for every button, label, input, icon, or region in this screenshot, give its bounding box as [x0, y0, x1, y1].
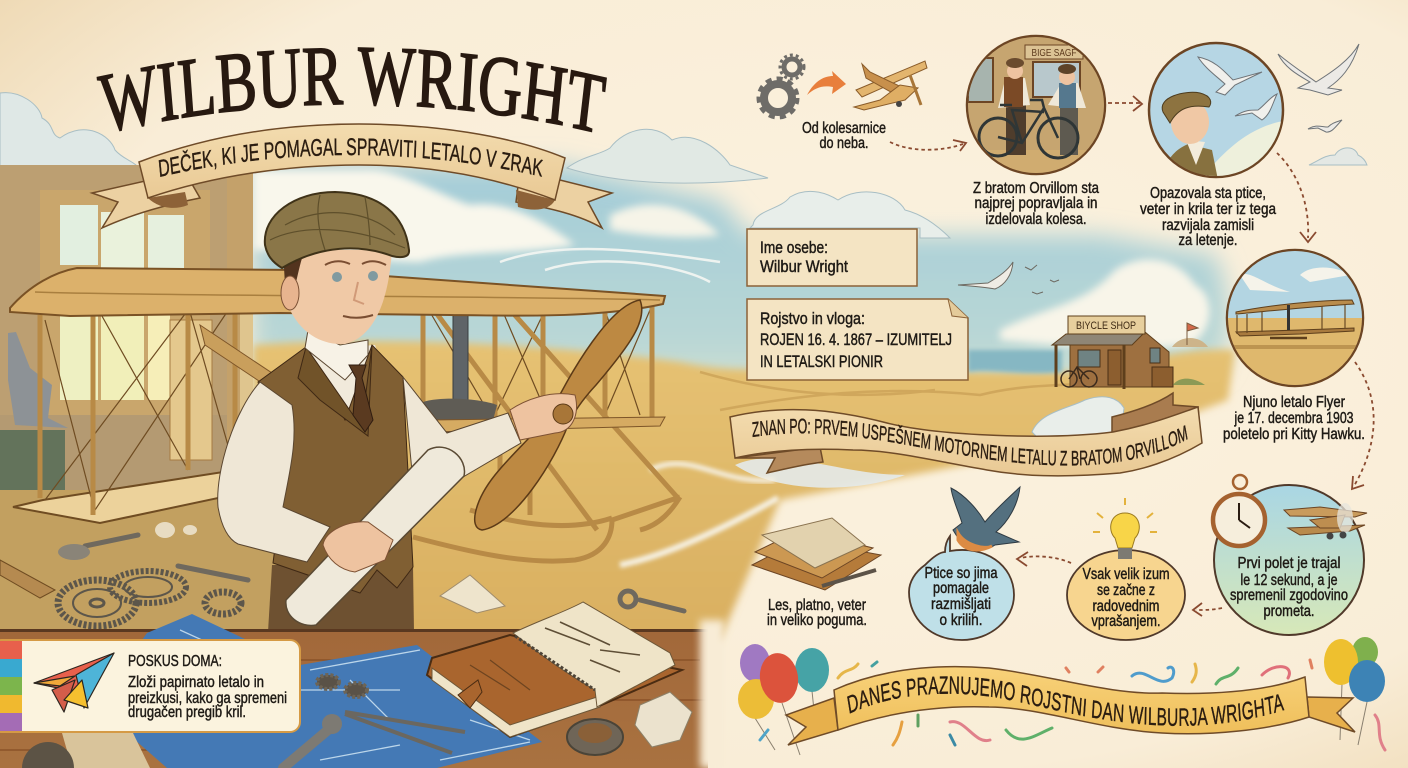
color stripes	[0, 641, 22, 731]
arrow	[1277, 153, 1316, 242]
balloons left	[738, 644, 829, 755]
caption: bicycles: najprej popravljala in	[974, 195, 1098, 212]
left sleeve	[218, 382, 330, 562]
workbench	[0, 620, 724, 768]
bench tools	[22, 675, 692, 768]
birthday ribbon	[784, 666, 1356, 746]
callout: try at home: drugačen pregib kril.	[128, 704, 246, 721]
workshop floor	[0, 470, 280, 635]
circle: first flight: Prvi polet je trajal	[1238, 555, 1340, 572]
info card: birth and role: ROJEN 16. 4. 1867 – IZUMITELJ	[760, 331, 952, 349]
clouds	[0, 93, 1209, 565]
info card: name: Wilbur Wright	[760, 258, 848, 276]
subtitle ribbon	[90, 123, 614, 230]
caption: from bike shop to sky: Od kolesarnice	[802, 120, 886, 137]
callout: try at home	[0, 640, 300, 732]
icon: light bulb	[1093, 498, 1157, 559]
barrel and tool	[0, 430, 65, 545]
birthday ribbon: DANES PRAZNUJEMO ROJSTNI DAN WILBURJA WRIGHTA	[847, 676, 1284, 726]
callout: try at home: Zloži papirnato letalo in	[128, 674, 264, 691]
bubble: curiosity: radovednim	[1092, 598, 1160, 615]
bubble: curiosity: Vsak velik izum	[1082, 566, 1170, 583]
vest	[258, 345, 413, 593]
scene: sky and desert backdrop	[253, 165, 1235, 640]
caption: birds: razvijala zamisli	[1162, 217, 1254, 234]
bubble: birds helped: pomagale	[933, 580, 989, 597]
seagull over dunes	[958, 262, 1059, 294]
balloons right	[1324, 637, 1385, 745]
caption: from bike shop to sky: do neba.	[820, 135, 868, 152]
shirt body	[305, 345, 400, 420]
bubble: curiosity: vprašanjem.	[1092, 613, 1160, 630]
circle: first flight: spremenil zgodovino	[1230, 587, 1348, 604]
caption: materials	[767, 597, 867, 629]
icon: small biplane	[1284, 503, 1367, 540]
bicycle shop: BIYCLE SHOP	[1076, 320, 1136, 332]
caption: bicycles: Z bratom Orvillom sta	[973, 180, 1099, 197]
caption: bicycles	[973, 180, 1099, 228]
arrow	[890, 140, 966, 151]
bubble: birds helped: razmišljati	[931, 596, 991, 613]
circle: first flight	[1214, 485, 1364, 635]
arrow	[1352, 362, 1374, 489]
icon: bluebird	[951, 487, 1020, 550]
circle: Flyer on dunes	[1225, 245, 1365, 388]
hand on roll	[323, 522, 393, 572]
caption: materials: in veliko poguma.	[767, 612, 867, 629]
icon: stopwatch	[1213, 475, 1265, 546]
circle: first flight: le 12 sekund, a je	[1240, 572, 1338, 589]
ribbon: known for: ZNAN PO: PRVEM USPEŠNEM MOTORNEM LETALU Z BRATOM ORVILLOM	[752, 418, 1188, 466]
info card: birth and role: Rojstvo in vloga:	[760, 310, 865, 328]
arrow	[1193, 603, 1222, 616]
caption: birds: Opazovala sta ptice,	[1150, 185, 1266, 202]
bicycle shop	[1052, 316, 1208, 389]
arrow	[1017, 552, 1071, 566]
caption: birds	[1140, 185, 1276, 249]
icon: gears to plane	[759, 55, 927, 117]
title: WILBUR WRIGHT	[96, 47, 607, 132]
icon: paper plane	[34, 653, 114, 712]
caption: birds: za letenje.	[1178, 232, 1238, 249]
bubble: curiosity	[1067, 550, 1185, 640]
cap	[265, 192, 409, 268]
right sleeve	[403, 377, 521, 482]
bubble: birds helped	[909, 536, 1014, 640]
bubble: curiosity: se začne z	[1097, 582, 1155, 599]
title	[96, 47, 607, 132]
arrow	[1108, 96, 1142, 111]
seagulls and small cloud	[1278, 44, 1367, 165]
collar and tie	[305, 330, 368, 380]
face	[283, 250, 392, 344]
boy with propeller and plans	[218, 192, 642, 632]
caption: from bike shop to sky	[802, 120, 886, 152]
caption: bicycles: izdelovala kolesa.	[986, 211, 1086, 228]
circle: watching birds	[1149, 43, 1290, 180]
workshop wall and window	[0, 165, 253, 545]
circle: first flight: prometa.	[1264, 603, 1314, 620]
callout: try at home: preizkusi, kako ga spremeni	[128, 690, 287, 707]
Flyer biplane	[10, 268, 680, 561]
bubble: birds helped: o krilih.	[940, 612, 982, 629]
caption: materials: Les, platno, veter	[768, 597, 866, 614]
info card: birth and role	[747, 299, 968, 380]
info card: birth and role: IN LETALSKI PIONIR	[760, 353, 883, 371]
icon: materials stack	[752, 518, 881, 590]
caption: Flyer: je 17. decembra 1903	[1234, 410, 1354, 427]
info card: name: Ime osebe:	[760, 239, 828, 257]
info card: name	[747, 229, 917, 286]
circle: bicycle repair: BIGE SAGF	[1032, 48, 1076, 59]
floor tools and gears	[0, 522, 684, 626]
hand on propeller	[510, 394, 576, 440]
bubble: birds helped: Ptice so jima	[924, 565, 998, 582]
trousers	[268, 565, 414, 632]
caption: birds: veter in krila ter iz tega	[1140, 201, 1276, 218]
caption: Flyer: Njuno letalo Flyer	[1243, 394, 1345, 411]
propeller	[475, 300, 642, 530]
circle: bicycle repair	[965, 30, 1110, 180]
caption: Flyer: poletelo pri Kitty Hawku.	[1223, 426, 1365, 443]
ribbon: known for	[729, 392, 1203, 477]
caption: Flyer	[1223, 394, 1365, 443]
subtitle ribbon: DEČEK, KI JE POMAGAL SPRAVITI LETALO V ZRAK	[158, 138, 544, 177]
confetti	[760, 660, 1385, 750]
plans roll	[286, 447, 464, 625]
blueprint	[100, 614, 542, 768]
journal	[427, 602, 682, 737]
callout: try at home: POSKUS DOMA:	[128, 653, 222, 670]
